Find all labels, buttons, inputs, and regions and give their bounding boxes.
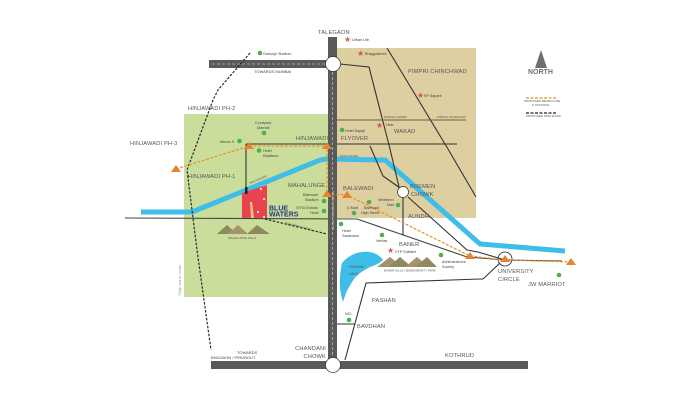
mountains: baner hills: [377, 257, 437, 272]
icon: north arrow: [528, 50, 553, 76]
road: towards mumbai: [209, 60, 329, 68]
place labels: Balewadi: [303, 193, 318, 197]
place labels: Society: [442, 265, 454, 269]
place labels: Hotel: [263, 149, 272, 153]
place labels: Gahunje Stadium: [263, 52, 292, 56]
place labels: Weekend: [378, 198, 394, 202]
building: blue waters plot: [242, 185, 267, 218]
panel: tan zone: [337, 48, 476, 218]
pashan lake: [340, 252, 383, 302]
place labels: VITS/Orchids: [296, 206, 318, 210]
note: map not to scale: *Map not to scale: [177, 264, 182, 296]
area labels: BALEWADI: [343, 186, 374, 192]
junction circles: [326, 56, 408, 372]
mountains: mahalunge hills: MAHALUNGE HILLS: [228, 236, 256, 240]
icon: north arrow: NORTH: [528, 69, 553, 76]
place labels: Radisson: [263, 154, 278, 158]
place labels: Urban Life: [352, 38, 369, 42]
star markers: ★: [417, 91, 424, 100]
pashan lake: LAKE: [349, 272, 359, 276]
place labels: Abhimanshree: [442, 260, 466, 264]
place labels: Hotel: [310, 211, 319, 215]
place labels: Bhagyashree: [365, 52, 387, 56]
place labels: PIMPLE SAUDAGAR: [437, 115, 467, 119]
place labels: High Street: [361, 211, 379, 215]
place labels: Marriott: [257, 126, 270, 130]
mountains: mahalunge hills: [217, 225, 270, 240]
area labels: BANER: [399, 242, 419, 248]
place labels: Stadium: [305, 198, 319, 202]
place labels: MULA RIVER: [340, 154, 359, 158]
star markers: ★: [376, 121, 383, 130]
road network lines: [125, 48, 562, 360]
pashan lake: PASHAN: [349, 265, 364, 269]
highway vertical: Mumbai - Bangalore Highway: [331, 190, 335, 230]
area labels: WAKAD: [394, 129, 415, 135]
area labels: AUNDH: [408, 214, 429, 220]
area labels: TALEGAON: [318, 30, 350, 36]
place labels: NCL: [345, 312, 352, 316]
road: bottom: [211, 361, 528, 369]
green location markers: [237, 51, 561, 322]
place labels: KP Square: [424, 94, 442, 98]
place labels: DANGE CHOWK: [384, 115, 407, 119]
area labels: HINJAWADI PH-1: [188, 174, 236, 180]
place labels: Hotel Sayaji: [345, 129, 365, 133]
place labels: VTP Solitaire: [395, 250, 416, 254]
metro line: [176, 146, 571, 262]
place labels: [211, 38, 467, 360]
label: blue waters: [269, 206, 299, 219]
area labels: CHOWK: [303, 354, 326, 360]
area labels: [130, 30, 566, 360]
junction: university circle: [498, 252, 512, 266]
area labels: BAVDHAN: [357, 324, 385, 330]
place labels: Hide: [386, 123, 394, 127]
legend: ring road: PROPOSED RING ROAD: [526, 114, 562, 118]
area labels: JW MARRIOT: [528, 282, 566, 288]
dashed ring road: [187, 53, 327, 350]
label: blue waters: WATERS: [269, 212, 299, 219]
metro stations: [171, 142, 576, 265]
place labels: MULA RIVER: [249, 174, 268, 185]
place labels: TOWARDS MUMBAI: [254, 69, 291, 74]
place labels: Balewadi: [364, 206, 379, 210]
place labels: Courtyard: [255, 121, 271, 125]
place labels: D Mart: [347, 206, 358, 210]
place labels: Hotel: [342, 229, 351, 233]
star markers: ★: [344, 35, 351, 44]
area labels: KOTHRUD: [445, 353, 474, 359]
river: [141, 159, 565, 251]
area labels: UNIVERSITY: [498, 269, 534, 275]
place labels: Mezzo 9: [220, 140, 234, 144]
area labels: CHOWK: [411, 192, 434, 198]
area labels: CHANDANI: [295, 346, 326, 352]
star markers: ★: [357, 49, 364, 58]
place labels: BHUGAON / PIRUNGUT: [211, 355, 256, 360]
place labels: TOWARDS KATRAJ: [285, 221, 313, 232]
place labels: Sadanand: [342, 234, 359, 238]
legend: metro line: & STATIONS: [532, 103, 549, 107]
star markers: ★: [387, 246, 394, 255]
legend: metro line: PROPOSED METRO LINE: [524, 99, 560, 103]
highway vertical: [328, 37, 337, 365]
area labels: HINJAWADI PH-2: [188, 106, 236, 112]
place labels: Veritas: [376, 239, 387, 243]
area labels: BREMEN: [410, 184, 435, 190]
area labels: PIMPRI CHINCHWAD: [408, 69, 467, 75]
legend: metro line: [524, 98, 560, 107]
area labels: HINJAWADI PH-3: [130, 141, 178, 147]
star markers: [344, 35, 424, 255]
area labels: HINJAWADI: [296, 136, 328, 142]
panel: green zone: [184, 114, 328, 297]
mountains: baner hills: BANER HILLS / BIODIVERSITY PARK: [384, 268, 436, 272]
area labels: PASHAN: [372, 298, 396, 304]
area labels: FLYOVER: [341, 136, 368, 142]
area labels: CIRCLE: [498, 277, 520, 283]
place labels: Mall: [387, 203, 394, 207]
area labels: MAHALUNGE: [288, 183, 325, 189]
place labels: TOWARDS: [237, 350, 258, 355]
label: blue waters: BLUE: [269, 206, 288, 213]
